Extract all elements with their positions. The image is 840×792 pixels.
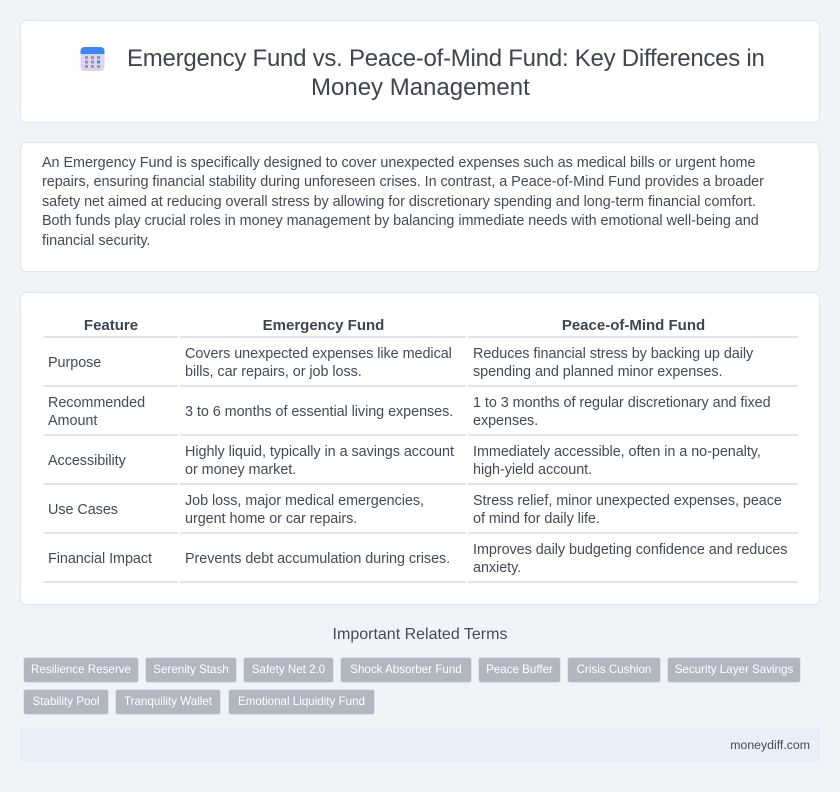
table row: use cases: Job loss, major medical emergencies, [185,493,424,509]
table row: accessibility: Accessibility [48,453,126,469]
tag [23,689,109,715]
footer bar [20,728,820,762]
tag [340,657,472,683]
tag: Peace Buffer [486,663,553,676]
title [127,45,765,101]
tag: Tranquility Wallet [124,695,212,708]
table row: financial impact: Prevents debt accumulation during crises. [185,551,450,567]
tag: Stability Pool [32,695,100,708]
text block: introduction: An Emergency Fund is specifically designed to cover unexpected expenses such as medical bills or urgent home [42,155,755,171]
table row: recommended amount [44,395,798,436]
table row: use cases [44,493,798,534]
tag [145,657,237,683]
table row: purpose [44,346,798,387]
tag: Resilience Reserve [31,663,131,676]
table row: purpose: Purpose [48,355,101,371]
text block: introduction: repairs, ensuring financial stability during unforeseen crises. In contrast, a Peace-of-Mind Fund provides a broader [42,174,764,190]
text block: introduction: Both funds play crucial roles in money management by balancing immediate needs with emotional well-being and [42,213,759,229]
title: Emergency Fund vs. Peace-of-Mind Fund: Key Differences in [127,45,765,72]
table row: accessibility: Highly liquid, typically in a savings account [185,444,454,460]
table row: recommended amount: Amount [48,413,97,429]
tag: Security Layer Savings [675,663,793,676]
table row: accessibility: or money market. [185,462,296,478]
text block: introduction: financial security. [42,233,150,249]
table row: purpose: Reduces financial stress by backing up daily [473,346,753,362]
panel: introduction [20,142,820,272]
tag [478,657,561,683]
text block: introduction [42,155,764,249]
table row: purpose: Covers unexpected expenses like medical [185,346,452,362]
tag list: related terms [23,657,801,715]
heading: important related terms: Important Related Terms [333,626,507,643]
panel: title card [20,20,820,123]
table row: financial impact: Financial Impact [48,551,152,567]
tag [567,657,661,683]
table row: financial impact [44,542,798,583]
table header [44,317,798,338]
table row: use cases: of mind for daily life. [473,511,600,527]
footer text: moneydiff.com [730,738,810,752]
table header: Peace-of-Mind Fund [562,317,705,334]
tag [115,689,221,715]
table row: accessibility [44,444,798,485]
table row: recommended amount: Recommended [48,395,145,411]
table row: recommended amount: 3 to 6 months of essential living expenses. [185,404,453,420]
tag: Safety Net 2.0 [252,663,325,676]
table row: use cases: urgent home or car repairs. [185,511,357,527]
text block: introduction: safety net aimed at reducing overall stress by allowing for discretionary spending and long-term financial comfort. [42,194,756,210]
table row: financial impact: anxiety. [473,560,521,576]
tag [23,657,139,683]
icon: calendar [80,47,104,71]
table row: recommended amount: expenses. [473,413,538,429]
tag: Crisis Cushion [577,663,651,676]
table row: accessibility: Immediately accessible, often in a no-penalty, [473,444,761,460]
table row: use cases: Use Cases [48,502,118,518]
table row: recommended amount: 1 to 3 months of regular discretionary and fixed [473,395,771,411]
table row: purpose: bills, car repairs, or job loss. [185,364,362,380]
table row: financial impact: Improves daily budgeting confidence and reduces [473,542,787,558]
tag: Serenity Stash [153,663,229,676]
tag [243,657,334,683]
table row: purpose: spending and planned minor expenses. [473,364,722,380]
title: Money Management [311,74,530,101]
tag: Shock Absorber Fund [350,663,462,676]
table header: Emergency Fund [263,317,384,334]
tag [667,657,801,683]
table row: use cases: Stress relief, minor unexpected expenses, peace [473,493,782,509]
tag [228,689,375,715]
tag: Emotional Liquidity Fund [238,695,365,708]
panel: comparison table [20,292,820,605]
table header: Feature [84,317,138,334]
table row: accessibility: high-yield account. [473,462,592,478]
